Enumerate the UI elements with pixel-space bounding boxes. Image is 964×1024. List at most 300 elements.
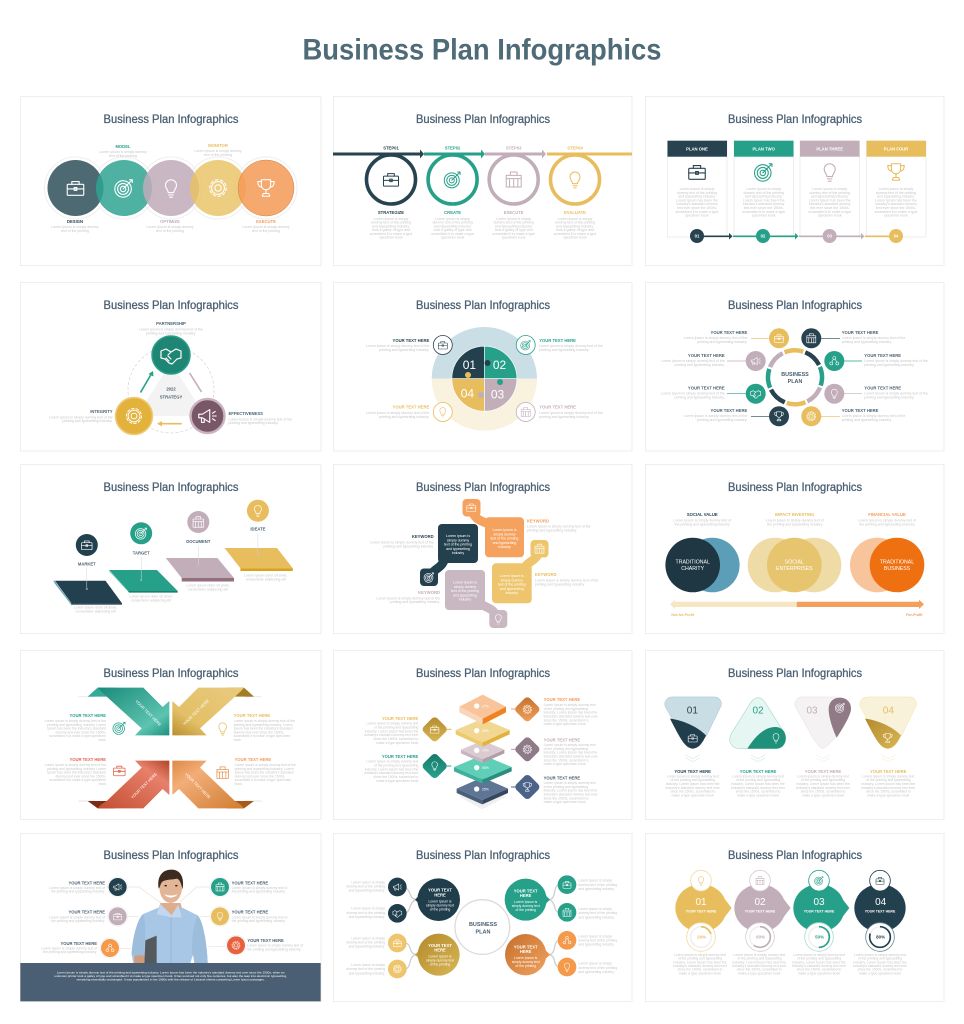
yellow block <box>492 540 548 603</box>
step labels: specimen book <box>441 236 465 240</box>
panel: keyword blocks <box>334 464 632 634</box>
orange block: Lorem Ipsum is <box>493 528 516 532</box>
stack text blocks: make a type specimen book <box>544 722 586 726</box>
column text: specimen book <box>884 214 908 218</box>
arrow text blocks: dummy text ever since the 1500s, <box>235 774 285 778</box>
ring labels: printing and typesetting industry. <box>697 418 747 422</box>
mauve block <box>445 570 507 628</box>
blob text blocks: of the printing and typesetting <box>678 957 722 961</box>
ring labels: Lorem Ipsum is simply dummy text of the <box>661 392 725 396</box>
arrow text blocks: Ipsum has been the industry's standard <box>234 727 293 731</box>
icon circles <box>433 336 535 422</box>
triangle text blocks: Lorem Ipsum is simply dummy text <box>862 774 914 778</box>
panel: hub and spokes: Business Plan Infographics <box>416 848 550 862</box>
stack text blocks: YOUR TEXT HERE <box>544 697 580 702</box>
corner text: printing and typesetting industry. <box>379 415 429 419</box>
platform labels: consectetur adipiscing elit <box>188 588 228 592</box>
step labels: specimen book <box>563 236 587 240</box>
step labels: dummy text of the printing <box>494 221 534 225</box>
column text: and typesetting industry. <box>811 195 849 199</box>
triangle text blocks: industry's standard dummy text ever <box>861 786 916 790</box>
traditional business: BUSINESS <box>884 566 911 572</box>
callout text: YOUR TEXT HERE <box>232 880 268 885</box>
teal lobe <box>505 879 550 921</box>
percent values: 50% <box>815 935 824 940</box>
orange lobe: YOUR TEXT <box>514 944 538 949</box>
arrow text blocks: dummy text ever since the 1500s, <box>56 774 106 778</box>
labels: text of the printing <box>109 154 137 158</box>
platform labels: consectetur adipiscing elit <box>131 599 171 603</box>
blob 03: 03 <box>813 897 825 908</box>
stack text blocks: industry's standard dummy text ever <box>544 714 599 718</box>
step labels: dummy text of the printing <box>371 221 411 225</box>
ring labels: YOUR TEXT HERE <box>864 353 901 358</box>
slate layer: 25% <box>482 787 489 791</box>
stems <box>86 533 259 590</box>
keyword labels: KEYWORD <box>535 572 557 577</box>
blob 01: YOUR TEXT HERE <box>686 910 717 914</box>
triangle 02 <box>730 698 786 749</box>
satellite text: dummy text of the printing <box>578 938 617 942</box>
orange block <box>462 499 524 557</box>
column cards <box>668 141 926 237</box>
keyword labels: printing and typesetting industry. <box>527 528 577 532</box>
mauve layer <box>461 741 504 763</box>
node labels <box>49 321 292 425</box>
blob text blocks: industry's standard dummy text ever <box>732 964 787 968</box>
stack text blocks: of the printing and typesetting <box>374 725 418 729</box>
callout text: Lorem Ipsum is simply dummy text of <box>41 946 97 950</box>
triangle text blocks: make a type specimen book <box>867 793 910 797</box>
bottom arrows and number dots: 03 <box>827 234 833 239</box>
mauve block: simply dummy <box>454 585 476 589</box>
percent values: 80% <box>876 935 885 940</box>
step labels: EXECUTE <box>504 210 524 215</box>
arrow text blocks: scrambled it to make a type specimen <box>235 778 291 782</box>
stack text blocks: since the 1500s, scrambled to <box>544 718 589 722</box>
bottom arrows and number dots: 04 <box>894 234 899 239</box>
gold lobe: Lorem Ipsum is <box>428 955 452 959</box>
bottom arrows and number dots: 01 <box>695 234 700 239</box>
corner text <box>366 338 603 419</box>
step icons <box>384 172 580 188</box>
node labels: INTEGRITY <box>90 409 113 414</box>
callout text: the printing and typesetting industry. <box>51 919 105 923</box>
value labels: FINANCIAL VALUE <box>868 512 906 517</box>
stack text blocks: of the printing and typesetting <box>544 785 588 789</box>
blob text blocks: industry. Lorem Ipsum has been the <box>733 960 786 964</box>
arrow text blocks: dummy text ever since the 1500s, <box>56 730 106 734</box>
callout text: the printing and typesetting industry. <box>43 950 97 954</box>
step labels: took a galley of type and <box>495 228 533 232</box>
triangle text blocks <box>666 769 916 797</box>
ring labels: YOUR TEXT HERE <box>688 353 725 358</box>
value labels: the printing and typesetting industry <box>767 522 823 526</box>
orange block: and typesetting <box>493 541 516 545</box>
satellite text: dummy text of the printing <box>578 883 617 887</box>
column text: Lorem Ipsum is simply <box>812 187 847 191</box>
quadrant numbers: 03 <box>491 388 504 402</box>
corner text: Lorem Ipsum is simply dummy text of the <box>539 411 603 415</box>
step labels: and typesetting industry. <box>556 224 594 228</box>
yellow layer: 30% <box>482 729 489 733</box>
bottom arrows and number dots: 02 <box>761 234 766 239</box>
node labels: Lorem Ipsum is simply dummy text of the <box>139 328 203 332</box>
column text: industry's standard dummy <box>743 202 785 206</box>
percent values <box>697 935 885 940</box>
satellite text: Lorem Ipsum is simply <box>351 880 385 884</box>
satellite text: and typesetting industry. <box>578 970 615 974</box>
side diamonds <box>421 696 541 801</box>
orange lobe <box>505 934 550 975</box>
platform labels: IDEATE <box>250 526 266 532</box>
teal layer <box>454 755 512 784</box>
corner text: YOUR TEXT HERE <box>539 405 576 410</box>
keyword labels: printing and typesetting industry. <box>390 600 440 604</box>
traditional business <box>850 538 924 592</box>
triangle text blocks: YOUR TEXT HERE <box>674 769 711 774</box>
arrow text blocks: YOUR TEXT HERE <box>235 757 271 762</box>
ring labels: printing and typesetting industry. <box>842 418 892 422</box>
step labels: STRATEGIZE <box>378 210 404 215</box>
triangle 01 <box>665 697 721 749</box>
satellite text: Lorem Ipsum is simply <box>578 962 612 966</box>
arrow text blocks: Ipsum has been the industry's standard <box>235 771 294 775</box>
orange lobe: Lorem Ipsum is <box>514 956 537 960</box>
callout text: YOUR TEXT HERE <box>68 880 105 885</box>
ring labels: printing and typesetting industry. <box>675 363 725 367</box>
panel: person with callouts <box>20 834 321 1002</box>
profit spectrum arrow: For-Profit <box>906 613 923 617</box>
panel: steps timeline: Business Plan Infographics <box>416 112 550 126</box>
blob text blocks: since the 1500s, scrambled to <box>797 968 842 972</box>
step labels: scrambled it to make a type <box>492 232 535 236</box>
callout text: YOUR TEXT HERE <box>232 910 268 915</box>
platform labels: Lorem ipsum dolor sit amet, <box>186 584 229 588</box>
triangle text blocks: Lorem Ipsum is simply dummy text <box>667 774 719 778</box>
callout text: the printing and typesetting industry. <box>232 890 286 894</box>
panel: business plan ring <box>646 282 944 451</box>
labels: EXECUTE <box>256 219 276 224</box>
triangle text blocks: of the printing and typesetting <box>866 778 911 782</box>
blob 02: YOUR TEXT HERE <box>745 910 776 914</box>
arrow text blocks: YOUR TEXT HERE <box>69 757 106 762</box>
stack text blocks: industry. Lorem Ipsum has been the <box>365 767 418 771</box>
arrow text blocks: printing and typesetting industry. Lorem <box>47 723 106 727</box>
stack text blocks: YOUR TEXT HERE <box>382 716 419 721</box>
ring labels: YOUR TEXT HERE <box>864 386 901 391</box>
column text: and typesetting industry. <box>678 195 716 199</box>
bottom arrows and number dots <box>690 229 903 243</box>
panel: strategy triangle <box>20 282 321 451</box>
column text: industry's standard dummy <box>875 202 917 206</box>
gold lobe: HERE <box>434 948 446 953</box>
centre label: PLAN <box>788 379 802 385</box>
panel: plan columns: Business Plan Infographics <box>728 112 862 126</box>
callout text: YOUR TEXT HERE <box>247 938 284 943</box>
keyword labels: Lorem Ipsum is simply dummy text of the <box>370 540 434 544</box>
keyword labels: Lorem Ipsum is simply dummy text of the <box>535 578 598 582</box>
blob 01 <box>675 884 732 932</box>
panel: overlapping circles: Business Plan Infographics <box>104 112 238 126</box>
panel: plan columns <box>646 96 944 266</box>
ring labels: printing and typesetting industry. <box>864 363 914 367</box>
value labels: Lorem Ipsum is simply dummy text of <box>858 518 916 522</box>
stack text blocks: Lorem Ipsum is simply dummy text <box>544 743 596 747</box>
column headers: PLAN THREE <box>816 146 843 151</box>
arrow text blocks: scrambled it to make a type specimen <box>49 778 106 782</box>
panel: value venn circles: Business Plan Infographics <box>728 480 862 494</box>
triangle text blocks: make a type specimen book <box>672 793 714 797</box>
panel: isometric stack: Business Plan Infographics <box>416 666 550 680</box>
step labels: STEP04 <box>567 146 583 150</box>
triangle text blocks: since the 1500s, scrambled to <box>670 790 715 794</box>
labels: Lorem Ipsum is simply dummy <box>146 225 194 229</box>
yellow block: simply dummy <box>501 578 523 582</box>
satellite text: dummy text of the printing <box>346 967 385 971</box>
step labels: and typesetting industry. <box>495 224 533 228</box>
dark block: text of the printing <box>444 543 472 547</box>
orange layer: 17% <box>482 704 489 708</box>
puzzle quadrants <box>452 346 517 411</box>
satellite text: and typesetting industry. <box>349 971 385 975</box>
value labels: SOCIAL VALUE <box>687 512 718 517</box>
ring labels: printing and typesetting industry. <box>864 396 914 400</box>
triangle text blocks: of the printing and typesetting <box>801 778 845 782</box>
panel: strategy triangle: Business Plan Infographics <box>104 298 238 312</box>
ring step circles <box>366 155 600 204</box>
corner text: printing and typesetting industry. <box>379 348 429 352</box>
satellite text: Lorem Ipsum is simply <box>351 963 385 967</box>
connector lines <box>727 338 862 416</box>
triangle text blocks: industry. Lorem Ipsum has been the <box>862 782 915 786</box>
stack text blocks: since the 1500s, scrambled to <box>544 758 589 762</box>
blob text blocks: Lorem Ipsum is simply dummy text <box>854 953 906 957</box>
stack text blocks: of the printing and typesetting <box>374 763 418 767</box>
step labels: STEP01 <box>383 146 399 150</box>
satellite text: Lorem Ipsum is simply <box>351 936 385 940</box>
blob 04 <box>854 884 906 932</box>
panel: four ribbon arrows <box>20 650 321 820</box>
centre triangle: 2022 <box>166 386 176 392</box>
ring labels: YOUR TEXT HERE <box>711 408 748 413</box>
connector stubs <box>447 709 516 787</box>
keyword labels: KEYWORD <box>412 534 434 539</box>
column text: Lorem Ipsum is simply <box>879 187 913 191</box>
keyword labels: Lorem Ipsum is simply dummy text of the <box>376 596 440 600</box>
column text: dummy text of the printing <box>810 191 850 195</box>
blob text blocks: make a type specimen book <box>798 971 840 975</box>
column text: Lorem Ipsum has been the <box>809 198 851 202</box>
satellite text <box>346 879 617 975</box>
blob 02: 02 <box>754 897 766 908</box>
centre triangle <box>137 362 205 416</box>
triangle 03: 03 <box>806 706 818 717</box>
traditional charity <box>665 538 740 592</box>
stack text blocks: YOUR TEXT HERE <box>382 754 419 759</box>
column text: and typesetting industry. <box>877 195 915 199</box>
callout text: Lorem Ipsum is simply dummy text of <box>49 886 105 890</box>
arrow bar <box>333 150 632 158</box>
red arrow <box>88 761 169 808</box>
step labels: took a galley of type and <box>556 228 594 232</box>
triangle text blocks: YOUR TEXT HERE <box>805 769 841 774</box>
teal lobe: Lorem Ipsum is <box>514 900 537 904</box>
yellow arrow <box>172 688 254 735</box>
arrow text blocks: scrambled it to make a type specimen <box>49 734 106 738</box>
blob 03 <box>793 884 849 932</box>
node labels: printing and typesetting industry. <box>62 419 113 423</box>
icon circles <box>76 500 269 556</box>
arrow text blocks: Lorem Ipsum is simply dummy text of the <box>45 763 106 767</box>
triangle text blocks: YOUR TEXT HERE <box>870 769 907 774</box>
labels: MONITOR <box>208 143 228 148</box>
satellite text: dummy text of the printing <box>578 911 617 915</box>
blob text blocks: industry. Lorem Ipsum has been the <box>792 960 846 964</box>
chevrons <box>686 755 895 762</box>
satellite text: Lorem Ipsum is simply <box>578 934 612 938</box>
platforms <box>54 548 293 605</box>
platform labels: Lorem ipsum dolor sit amet, <box>129 595 173 599</box>
ring labels: YOUR TEXT HERE <box>711 330 748 335</box>
platform labels: consectetur adipiscing elit <box>76 609 116 613</box>
step labels: EVALUATE <box>564 210 586 215</box>
satellite text: dummy text of the printing <box>346 884 385 888</box>
yellow block: and typesetting <box>500 587 524 591</box>
arrow icons <box>113 722 228 778</box>
social enterprises: ENTERPRISES <box>776 566 813 572</box>
column text: Lorem Ipsum is simply <box>746 187 781 191</box>
arrow text blocks: scrambled it to make a type specimen <box>234 734 290 738</box>
arrow captions: YOUR TEXT HERE <box>182 698 210 726</box>
column text: specimen book <box>818 214 842 218</box>
value labels <box>673 512 916 526</box>
node circles <box>116 336 224 434</box>
dark block: and typesetting <box>446 547 470 551</box>
step labels: took a galley of type and <box>372 228 410 232</box>
blob text blocks: since the 1500s, scrambled to <box>858 968 903 972</box>
slate layer <box>457 777 508 804</box>
progress rings <box>687 923 894 951</box>
arrow text blocks: printing and typesetting industry. Lorem <box>235 767 294 771</box>
satellite text: and typesetting industry. <box>349 945 385 949</box>
arrow text blocks: Lorem Ipsum is simply dummy text of the <box>45 719 106 723</box>
panel: numbered triangles <box>646 650 944 820</box>
column text: scrambled it to make a type <box>808 210 851 214</box>
arrow text blocks: book <box>235 782 242 786</box>
yellow block: industry <box>506 591 518 595</box>
callout text: the printing and typesetting industry. <box>247 947 301 951</box>
corner text: YOUR TEXT HERE <box>393 338 430 343</box>
callout text: Lorem Ipsum is simply dummy text of <box>247 944 303 948</box>
main title: Business Plan Infographics <box>302 34 662 66</box>
column text: scrambled it to make a type <box>875 210 917 214</box>
centre label: BUSINESS <box>781 372 809 378</box>
arrow text blocks: YOUR TEXT HERE <box>69 713 106 718</box>
column text: industry's standard dummy <box>809 202 851 206</box>
stack text blocks: industry. Lorem Ipsum has been the <box>544 789 597 793</box>
value labels: IMPACT INVESTING <box>775 512 814 517</box>
labels: Lorem Ipsum is simply dummy <box>194 149 242 153</box>
quadrant numbers <box>461 358 506 402</box>
triangle text blocks: industry. Lorem Ipsum has been the <box>666 782 720 786</box>
column text: specimen book <box>752 214 776 218</box>
stack text blocks: industry. Lorem Ipsum has been the <box>544 751 597 755</box>
node labels: PARTNERSHIP <box>156 321 186 326</box>
yellow layer <box>456 719 510 747</box>
column text: dummy text of the printing <box>876 191 916 195</box>
step labels: Lorem Ipsum is simply <box>496 217 531 221</box>
blob text blocks: make a type specimen book <box>859 971 901 975</box>
column text: dummy text of the printing <box>677 191 717 195</box>
value labels: the printing and typesetting industry <box>859 522 915 526</box>
orange layer <box>459 695 506 724</box>
spokes <box>406 885 558 969</box>
node labels: Lorem Ipsum is simply dummy text of the <box>49 415 113 419</box>
labels: Lorem Ipsum is simply dummy <box>99 150 147 154</box>
dark block: Lorem Ipsum is <box>446 534 470 538</box>
triangle text blocks: industry's standard dummy text ever <box>666 786 721 790</box>
corner text: Lorem Ipsum is simply dummy text of the <box>539 344 603 348</box>
stack text blocks <box>364 697 599 804</box>
node labels: printing and typesetting industry. <box>228 421 279 425</box>
stack text blocks: industry's standard dummy text ever <box>544 754 599 758</box>
labels: Lorem Ipsum is simply dummy <box>51 225 99 229</box>
banner <box>20 963 321 1001</box>
arrow text blocks: Ipsum has been the industry's standard <box>47 727 106 731</box>
satellite text: and typesetting industry. <box>578 915 615 919</box>
panel: business plan ring: Business Plan Infographics <box>728 298 862 312</box>
panel: overlapping circles <box>20 96 321 266</box>
step labels: scrambled it to make a type <box>431 232 474 236</box>
platform labels: DOCUMENT <box>186 539 211 544</box>
panel: steps timeline <box>333 96 632 266</box>
stack text blocks: of the printing and typesetting <box>544 747 588 751</box>
blob text blocks <box>673 953 908 975</box>
corner text: YOUR TEXT HERE <box>539 338 576 343</box>
satellite text: Lorem Ipsum is simply <box>578 879 612 883</box>
satellite text: dummy text of the printing <box>578 966 617 970</box>
keyword labels <box>370 518 598 604</box>
profit spectrum arrow <box>670 600 924 617</box>
yellow block: Lorem Ipsum is <box>500 574 524 578</box>
top icons <box>691 870 890 891</box>
social enterprises: SOCIAL <box>785 560 804 566</box>
platform labels: consectetur adipiscing elit <box>246 577 286 581</box>
blob text blocks: industry's standard dummy text ever <box>673 964 728 968</box>
column text: scrambled it to make a type <box>742 210 785 214</box>
panel: rising platforms: Business Plan Infographics <box>104 480 238 494</box>
stack text blocks: make a type specimen book <box>376 779 419 783</box>
satellite text: dummy text of the printing <box>346 940 385 944</box>
triangle text blocks: Lorem Ipsum is simply dummy text <box>732 774 784 778</box>
traditional charity: TRADITIONAL <box>676 560 710 566</box>
blob text blocks: make a type specimen book <box>738 971 781 975</box>
gold lobe: simply dummy text <box>426 959 454 963</box>
dark block: industry <box>452 551 464 555</box>
labels: Lorem Ipsum is simply dummy <box>242 225 290 229</box>
step labels <box>370 146 596 240</box>
ring labels <box>661 330 928 422</box>
callout text: the printing and typesetting industry. <box>232 919 286 923</box>
labels: text of the printing <box>61 229 89 233</box>
step labels: took a galley of type and <box>434 228 472 232</box>
keyword labels: KEYWORD <box>527 518 549 524</box>
column text: Lorem Ipsum has been the <box>676 198 718 202</box>
quadrant numbers: 04 <box>461 386 474 400</box>
traditional charity: CHARITY <box>681 566 705 572</box>
panel: numbered blobs with rings: Business Plan Infographics <box>728 848 862 862</box>
